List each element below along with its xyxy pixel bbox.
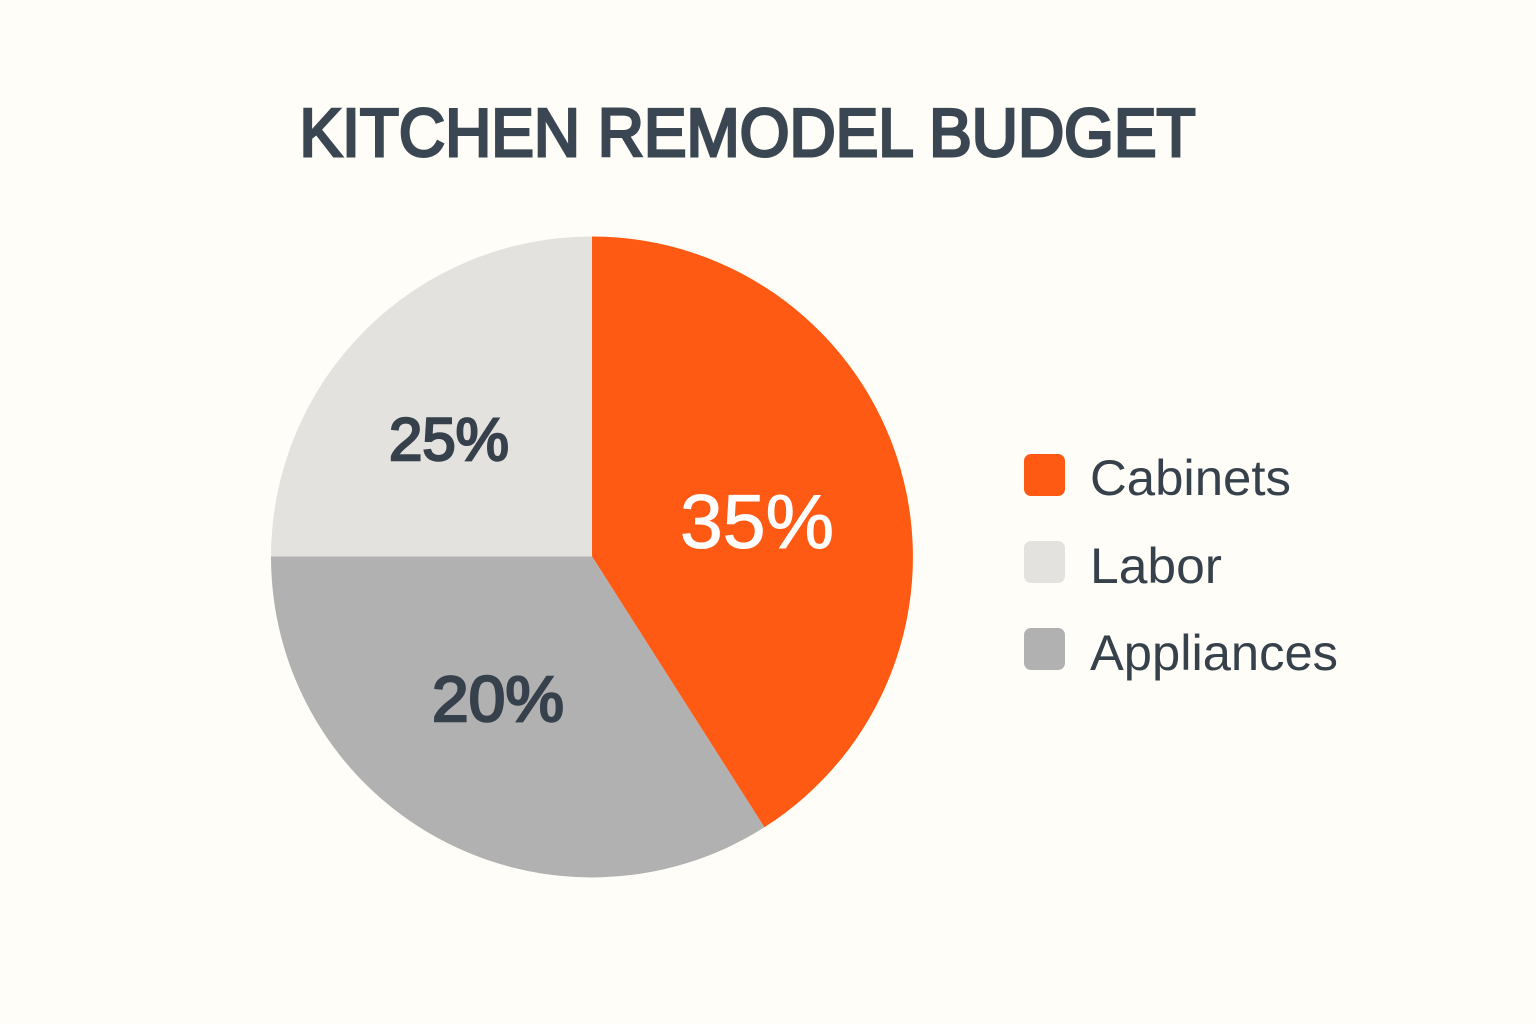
legend item: Cabinets: Cabinets xyxy=(1090,450,1291,506)
legend item: Appliances: Appliances xyxy=(1090,625,1338,681)
label: 35%: 35% xyxy=(680,480,834,565)
legend xyxy=(1024,450,1338,681)
legend item: Labor: Labor xyxy=(1090,538,1222,594)
pie chart xyxy=(271,236,913,877)
slice: Appliances 20% xyxy=(271,556,764,877)
title: KITCHEN REMODEL BUDGET xyxy=(300,95,1196,171)
slice: Cabinets 35% xyxy=(592,236,913,827)
legend item: Labor xyxy=(1024,538,1222,594)
label: 25%: 25% xyxy=(389,406,509,473)
slice: Labor 25% xyxy=(271,236,592,556)
label: 20%: 20% xyxy=(432,663,564,735)
